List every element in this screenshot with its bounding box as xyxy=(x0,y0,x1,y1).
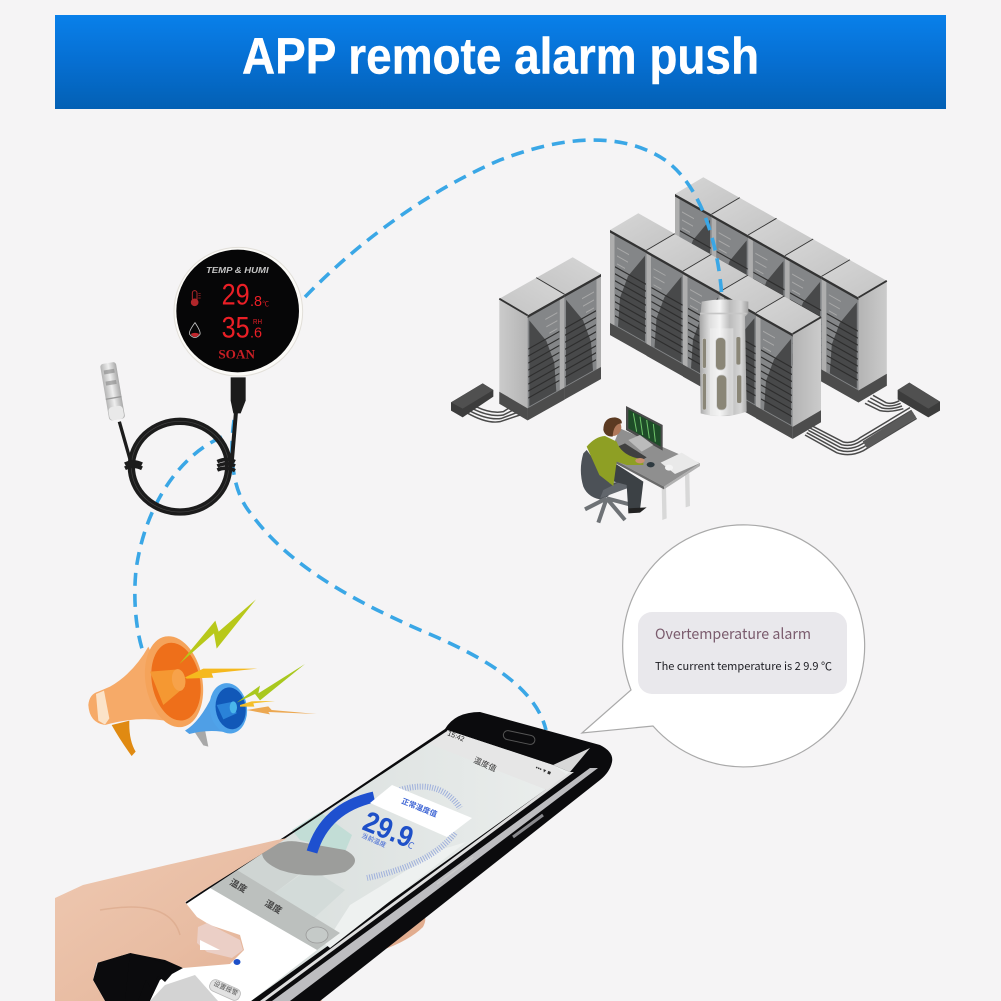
blue gauge arc xyxy=(312,797,374,852)
sensor to siren dashed link xyxy=(135,437,222,652)
temperature reading xyxy=(222,279,269,344)
temperature reading: .6 xyxy=(250,326,262,342)
humidity drop icon xyxy=(189,323,200,337)
phone screen labels xyxy=(212,730,552,998)
temperature and humidity device xyxy=(100,247,303,512)
white lower panel xyxy=(150,888,317,1001)
hand and phone xyxy=(55,712,612,1001)
server cabinets: back row xyxy=(675,177,887,402)
phone speaker xyxy=(503,730,536,745)
phone screen labels: 湿度 xyxy=(263,897,284,916)
phone screen labels: ℃ xyxy=(403,838,416,851)
app header bar xyxy=(427,730,566,790)
fingers behind the phone xyxy=(298,913,425,1001)
title: APP remote alarm push xyxy=(242,28,759,84)
phone edge bands xyxy=(260,768,598,1001)
thumbnail xyxy=(197,923,243,958)
phone screen labels: 设置报警 xyxy=(212,979,240,998)
small sensor probe xyxy=(100,362,125,421)
gauge dial xyxy=(367,787,460,878)
phone screen labels: 温度值 xyxy=(472,755,498,774)
header banner xyxy=(55,15,946,109)
bottom pill xyxy=(208,978,242,1001)
sensor to phone dashed link xyxy=(232,420,546,730)
brand: SOAN xyxy=(218,348,255,362)
phone screen xyxy=(150,730,590,1001)
sensor probe large xyxy=(699,299,748,416)
blue megaphone xyxy=(185,681,250,747)
thermometer icon xyxy=(191,291,201,306)
phone screen labels: 温度 xyxy=(228,876,249,895)
network switches and cables xyxy=(451,383,940,455)
operator at desk xyxy=(581,406,700,523)
phone screen labels: 正常温度值 xyxy=(400,796,439,819)
humidity reading: 35 xyxy=(222,311,250,344)
phone screen labels: 29.9 xyxy=(358,806,418,855)
alarm message: The current temperature is 2 9.9 ℃ xyxy=(655,658,832,674)
speech bubble xyxy=(582,525,865,767)
cable loop xyxy=(119,412,236,512)
temperature reading: .8 xyxy=(250,294,262,310)
monitor xyxy=(626,406,663,452)
screen left edge outline xyxy=(186,730,447,903)
smartphone body xyxy=(93,712,612,1001)
alarm title: Overtemperature alarm xyxy=(655,623,811,644)
device label: TEMP & HUMI xyxy=(206,266,270,275)
temperature reading: RH xyxy=(253,317,262,326)
tab bar xyxy=(210,870,340,950)
white status card xyxy=(370,785,472,837)
phone screen labels: ••• ▾ ■ xyxy=(534,765,552,777)
lightning bolts xyxy=(179,599,317,714)
temperature reading: ℃ xyxy=(262,300,269,308)
settings icon xyxy=(306,927,328,943)
phone screen labels: 当前温度 xyxy=(360,831,388,850)
device body xyxy=(174,247,303,376)
orange megaphone xyxy=(88,631,211,756)
power connector xyxy=(231,377,246,413)
phone screen labels: 15:42 xyxy=(446,730,465,743)
server cabinets: left pair xyxy=(499,257,601,420)
blurred phone corner teeth xyxy=(125,953,183,1001)
blurred photo in screen xyxy=(292,812,352,852)
server cabinets: middle row xyxy=(610,213,821,439)
office chair xyxy=(581,450,638,523)
hand holding phone xyxy=(55,838,287,1001)
operator figure xyxy=(587,417,647,513)
icon: megaphones xyxy=(88,599,317,756)
server room illustration xyxy=(305,140,940,523)
notification card xyxy=(638,612,847,694)
server to device dashed link, drawn under the probe xyxy=(305,140,722,298)
desk xyxy=(608,428,700,520)
temperature reading: 29 xyxy=(222,279,250,312)
